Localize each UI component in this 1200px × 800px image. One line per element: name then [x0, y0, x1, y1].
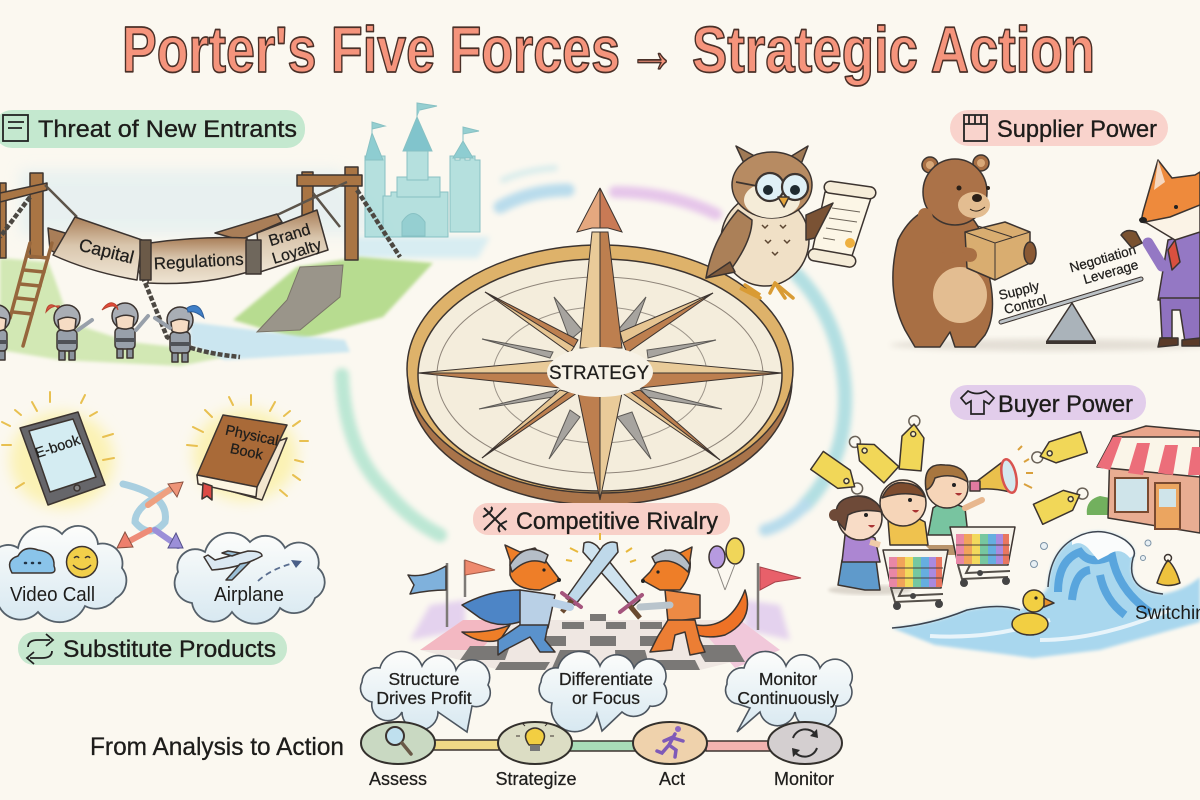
panel: competitive rivalry	[408, 503, 801, 670]
arena wash	[410, 600, 790, 640]
checkerboard floor	[420, 614, 780, 670]
label: strategy: STRATEGY	[549, 363, 649, 384]
icon: physical book	[197, 415, 287, 500]
heading: threat of new entrants	[0, 110, 305, 148]
stone: monitor	[768, 722, 842, 789]
compass rim	[407, 245, 793, 493]
storefront	[1087, 426, 1200, 533]
process links	[433, 740, 770, 751]
fox in suit	[1121, 160, 1200, 347]
stone: act	[633, 722, 707, 789]
shoppers	[828, 465, 982, 595]
sky wash	[20, 170, 390, 235]
cloud: airplane: Airplane	[214, 584, 284, 606]
label: capital: Capital	[77, 235, 136, 268]
icon: chat cloud	[10, 548, 55, 573]
buoy	[1157, 554, 1180, 586]
icon: physical book: Physical	[224, 423, 280, 450]
balloons	[709, 538, 744, 590]
heading: buyer power	[950, 385, 1146, 420]
river	[190, 322, 350, 360]
rays	[2, 392, 308, 496]
heading: threat of new entrants: Threat of New Entrants	[38, 116, 297, 143]
fox knight left	[462, 545, 570, 655]
bridge planks	[48, 210, 328, 284]
compass	[407, 188, 793, 505]
tablet glow	[10, 412, 114, 508]
book glow	[193, 409, 297, 501]
title: →	[628, 13, 676, 86]
heading: competitive rivalry	[473, 503, 730, 535]
label: brand loyalty: Loyalty	[270, 237, 324, 268]
flags	[408, 560, 801, 630]
castle	[345, 103, 490, 258]
bubble: monitor continuously: Monitor	[759, 669, 817, 689]
icon: smiley	[66, 546, 98, 578]
bridge posts	[0, 167, 362, 260]
title: Strategic Action	[692, 13, 1095, 86]
label: regulations: Regulations	[153, 250, 244, 273]
fox knight right	[640, 547, 748, 655]
stone: strategize	[495, 722, 577, 789]
stone: assess: Assess	[369, 769, 427, 789]
panel: buyer power	[811, 385, 1200, 658]
stone: monitor: Monitor	[774, 769, 834, 789]
cloud: video call	[0, 526, 126, 622]
panel: substitute products	[0, 392, 325, 665]
stone: assess	[361, 722, 435, 789]
scroll	[807, 180, 877, 268]
compass base	[408, 255, 792, 505]
grass hills	[0, 258, 240, 366]
heading: substitute products: Substitute Products	[63, 636, 276, 663]
panel: supplier power	[890, 110, 1200, 351]
road	[257, 265, 343, 332]
seesaw	[997, 242, 1142, 344]
shopping carts	[883, 527, 1015, 610]
icon: plane	[204, 551, 302, 581]
heading: buyer power: Buyer Power	[998, 391, 1133, 418]
label: supply control: Control	[1003, 292, 1048, 317]
heading: supplier power	[950, 110, 1168, 146]
diagonal points	[482, 292, 720, 460]
compass hub	[547, 347, 653, 397]
wave	[892, 532, 1200, 658]
bear	[893, 155, 992, 347]
bubble: structure drives profit	[361, 651, 490, 732]
heading: from analysis to action: From Analysis to Action	[90, 733, 344, 761]
label: supply control: Supply	[997, 278, 1041, 303]
box	[965, 222, 1030, 280]
knights	[0, 303, 204, 362]
bubble: differentiate or focus: or Focus	[572, 688, 640, 708]
owl with scroll	[706, 146, 877, 298]
shadow	[890, 339, 1200, 351]
price tags	[811, 415, 1092, 524]
cloud: video call: Video Call	[10, 584, 95, 606]
icon: tablet e-book	[20, 412, 105, 505]
heading: substitute products	[18, 632, 287, 665]
crossed swords	[562, 533, 642, 618]
cloud: airplane	[175, 533, 325, 624]
label: negotiation leverage: Negotiation	[1068, 242, 1138, 275]
panel: threat of new entrants	[0, 103, 490, 366]
title: Porter's Five Forces	[122, 13, 620, 86]
title	[122, 13, 1095, 86]
label: brand loyalty: Brand	[267, 221, 313, 250]
bubble: structure drives profit: Structure	[388, 669, 460, 689]
duck	[1012, 590, 1054, 635]
icon: tablet e-book: E-book	[33, 432, 83, 462]
panel: from analysis to action	[90, 651, 852, 789]
arrows swirl	[117, 482, 183, 548]
swirl bands around compass	[342, 168, 845, 535]
megaphone	[970, 446, 1033, 494]
bubble: differentiate or focus	[539, 651, 667, 732]
ladder	[10, 243, 52, 346]
bubble: structure drives profit: Drives Profit	[376, 688, 472, 708]
heading: supplier power: Supplier Power	[997, 116, 1157, 143]
bubble: monitor continuously	[726, 651, 852, 732]
label: negotiation leverage: Leverage	[1082, 257, 1140, 287]
heading: competitive rivalry: Competitive Rivalry	[516, 508, 718, 535]
bridge ropes and chains	[0, 182, 400, 357]
bubble: differentiate or focus: Differentiate	[559, 669, 653, 689]
stone: strategize: Strategize	[495, 769, 577, 789]
stone: act: Act	[659, 769, 685, 789]
bubble: monitor continuously: Continuously	[737, 688, 839, 708]
icon: physical book: Book	[229, 441, 265, 464]
silver points	[479, 297, 722, 459]
cardinal points	[418, 188, 782, 500]
